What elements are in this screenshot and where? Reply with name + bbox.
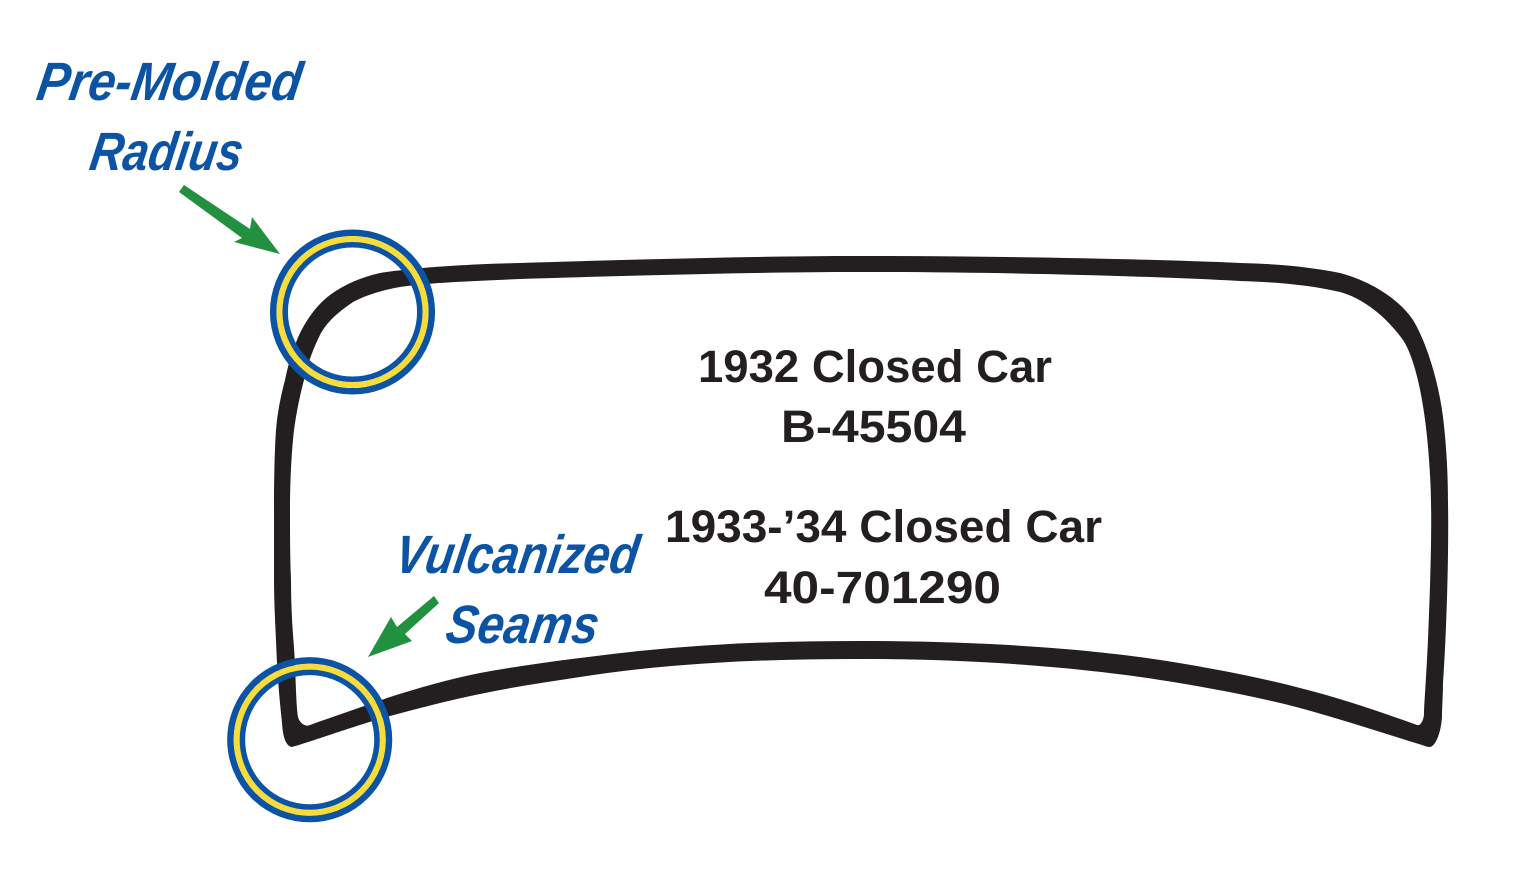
arrow: pre-molded radius xyxy=(179,185,280,254)
label: 1932 closed car: 1932 Closed Car xyxy=(698,341,1052,392)
callout: vulcanized seams: Seams xyxy=(442,594,604,655)
callout: pre-molded radius: Radius xyxy=(86,121,248,182)
callout: pre-molded radius xyxy=(33,51,308,182)
part number: 40-701290: 40-701290 xyxy=(764,562,1001,613)
callout: vulcanized seams xyxy=(391,524,645,655)
part number text block xyxy=(665,341,1102,613)
circle highlight: bottom-left seam xyxy=(230,660,389,819)
arrow: vulcanized seams xyxy=(368,596,439,657)
callout: vulcanized seams: Vulcanized xyxy=(391,524,645,585)
label: 1933-34 closed car: 1933-’34 Closed Car xyxy=(665,501,1102,552)
part number: B-45504: B-45504 xyxy=(781,401,966,452)
weatherstrip outline xyxy=(274,256,1448,747)
circle highlight: top-left radius xyxy=(273,233,432,391)
callout: pre-molded radius: Pre-Molded xyxy=(33,51,308,112)
